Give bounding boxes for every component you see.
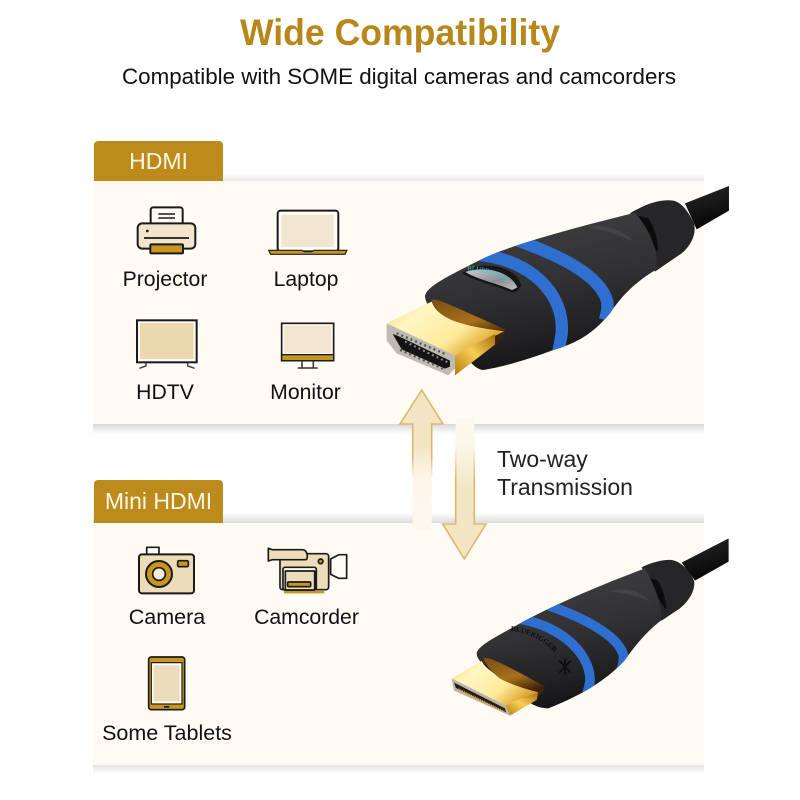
plug face [452, 678, 510, 716]
label: Camera: Camera [129, 605, 205, 629]
text: Two-way Transmission: Two-way [497, 446, 588, 472]
tab: HDMI: HDMI [129, 148, 188, 174]
tab: Mini HDMI: Mini HDMI [105, 488, 212, 514]
recess [483, 658, 545, 696]
panel: Mini HDMI [93, 480, 704, 774]
label: Monitor: Monitor [270, 381, 341, 404]
label: Camcorder: Camcorder [254, 606, 359, 629]
arrow: down [443, 418, 486, 559]
housing [477, 568, 662, 708]
logo emblem [559, 658, 571, 675]
recess [432, 300, 505, 345]
icon: projector [138, 207, 195, 253]
text: Two-way Transmission [497, 446, 633, 500]
title: Wide Compatibility [240, 12, 560, 53]
gold side [505, 692, 538, 716]
gold top [452, 661, 538, 705]
label: Laptop: Laptop [274, 268, 338, 291]
blue bands [480, 241, 607, 352]
icon: monitor [282, 323, 334, 368]
cable [682, 538, 729, 581]
tab: HDMI [94, 141, 223, 181]
gold side [455, 334, 495, 375]
housing [425, 213, 657, 370]
label: Projector: Projector [123, 268, 207, 291]
arrow: up [400, 390, 443, 530]
cable [685, 186, 729, 229]
text: Two-way Transmission: Transmission [497, 474, 633, 500]
icon: HDTV [137, 320, 197, 368]
logo window: BLUERIGGER [468, 266, 509, 282]
strain relief [630, 200, 695, 272]
plug face [387, 323, 455, 375]
tab: Mini HDMI [94, 480, 223, 523]
label: Some Tablets: Some Tablets [102, 721, 232, 745]
highlight ridge [610, 589, 650, 602]
connector: Mini HDMI [452, 538, 729, 716]
icon: camera [139, 547, 194, 593]
logo text: BLUERIGGER [510, 626, 556, 652]
strain relief [642, 560, 694, 621]
icon: tablet [149, 657, 185, 710]
highlight ridge [587, 226, 633, 242]
blue bands [517, 605, 623, 693]
logo window [462, 266, 522, 292]
subtitle: Compatible with SOME digital cameras and camcorders [122, 64, 676, 89]
gold top [387, 302, 504, 355]
label: HDTV: HDTV [136, 381, 195, 404]
icon: laptop [269, 211, 347, 254]
icon: camcorder [268, 548, 347, 593]
connector: HDMI [386, 186, 729, 376]
panel: HDMI [93, 141, 704, 434]
